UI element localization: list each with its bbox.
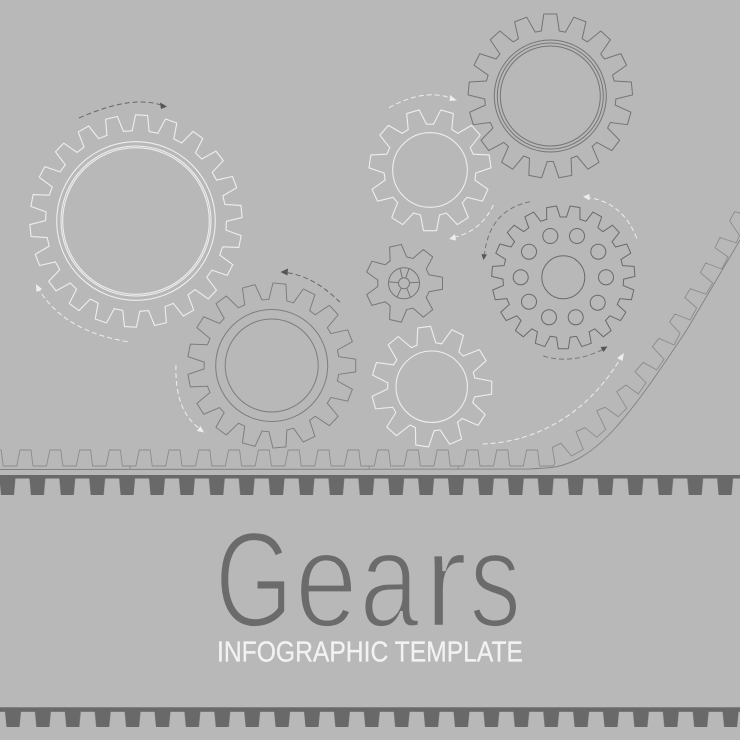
title: e: [295, 504, 358, 656]
title: [215, 504, 521, 656]
rack: upper dark toothed band: [0, 475, 740, 495]
gear: large white outline, left: [29, 114, 243, 328]
arrow: dark dashed left of holed gear: [482, 202, 530, 260]
gear: grey outline, top right: [467, 14, 633, 179]
arrow: white dashed left of grey gear: [176, 365, 204, 432]
gear: white outline, top centre: [368, 107, 492, 231]
arrow: long white dashed curve: [483, 353, 624, 444]
gear: nineteen-tooth with ten holes: [491, 205, 636, 349]
subtitle: INFOGRAPHIC TEMPLATE: [217, 637, 523, 669]
title: a: [360, 504, 419, 656]
title: s: [470, 504, 521, 656]
title: r: [424, 504, 468, 656]
gear: white outline, lower centre: [370, 325, 492, 448]
arrow: white dashed right of holed gear: [583, 194, 637, 238]
arrow: dark dashed above large gear: [79, 102, 167, 118]
toothed belt outline: [0, 212, 740, 469]
arrow: white dashed below large gear: [36, 284, 128, 342]
arrow: white dashed above top centre gear: [389, 95, 457, 108]
gear: grey outline, bottom centre: [186, 282, 356, 449]
arrow: dark dashed below holed gear: [543, 346, 608, 359]
arrow: dark dashed above grey gear: [280, 268, 340, 302]
arrow: white dashed below top centre gear: [449, 205, 493, 240]
title: G: [215, 504, 293, 656]
gear: small seven-tooth with spoked hub: [363, 243, 442, 323]
rack: lower dark toothed band: [0, 707, 740, 727]
